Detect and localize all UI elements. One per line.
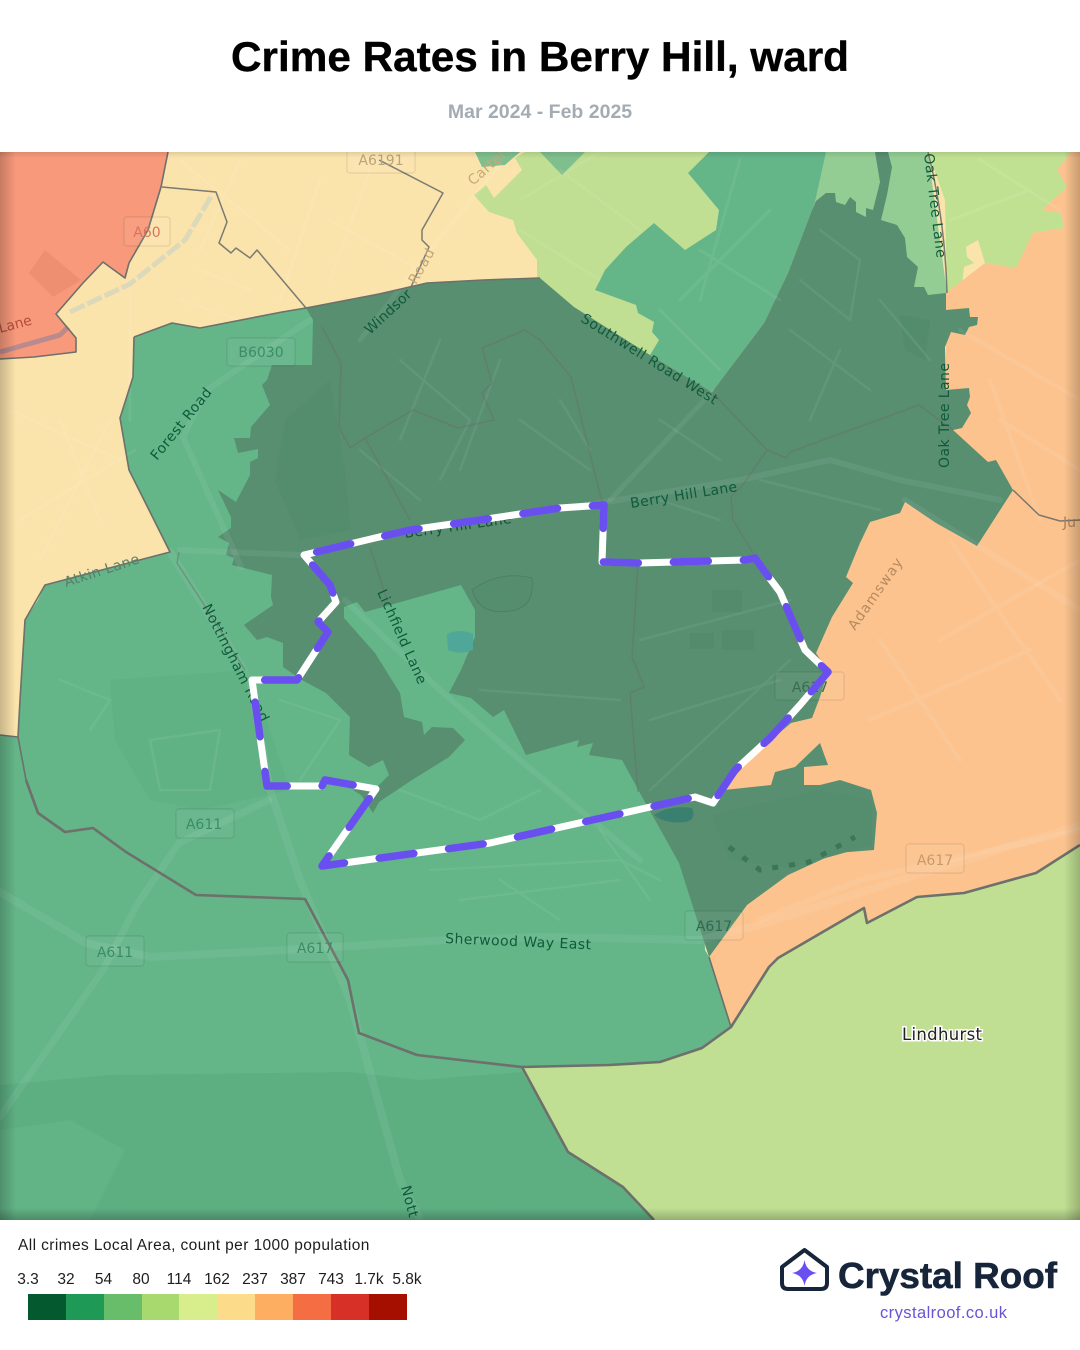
legend tick labels: 3.3 <box>17 1271 39 1288</box>
logo: Crystal Roof <box>780 1248 1058 1322</box>
road shield labels: A6191 <box>358 153 404 169</box>
road shield labels: A611 <box>97 945 133 961</box>
legend tick labels: 80 <box>132 1271 150 1288</box>
road name labels: Road <box>406 246 438 287</box>
road name labels: Adamsway <box>845 555 906 633</box>
road name labels: Southwell Road West <box>578 311 721 408</box>
legend tick labels: 114 <box>167 1271 191 1288</box>
road name labels: Ju <box>1062 515 1076 531</box>
road shield labels: A617 <box>917 853 953 869</box>
road name labels: Forest Road <box>148 385 215 464</box>
road name labels: Nottingham Road <box>198 602 272 725</box>
roads <box>0 152 1080 1220</box>
road name labels: Oak Tree Lane <box>937 363 953 468</box>
title: Crime Rates in Berry Hill, ward <box>231 33 849 80</box>
website url: crystalroof.co.uk <box>880 1304 1008 1322</box>
legend colour scale <box>28 1294 407 1320</box>
road name labels: Berry Hill Lane <box>403 511 513 542</box>
legend tick labels: 1.7k <box>354 1271 384 1288</box>
legend tick labels: 5.8k <box>392 1271 422 1288</box>
area: orange east <box>709 152 1080 1027</box>
subtitle: date range: Mar 2024 - Feb 2025 <box>448 101 632 123</box>
area: mid green west and south <box>0 308 731 1220</box>
area: cream base <box>0 152 1080 1220</box>
area: pale green north <box>812 152 947 310</box>
road shield labels <box>86 148 964 966</box>
road name labels: Nott <box>397 1184 421 1219</box>
icon: house with star <box>782 1250 827 1289</box>
road name labels: Lichfield Lane <box>373 587 429 687</box>
legend tick labels: 387 <box>280 1271 306 1288</box>
place label: Lindhurst: Lindhurst <box>902 1025 983 1044</box>
map: crime rate choropleth <box>0 152 1080 1220</box>
road name labels: Atkin Lane <box>62 551 141 591</box>
road shield labels: A617 <box>297 941 333 957</box>
legend tick labels: 162 <box>204 1271 230 1288</box>
legend tick labels: 743 <box>318 1271 344 1288</box>
interior boundaries <box>162 152 1080 792</box>
map edge vignette <box>0 152 1080 1220</box>
legend tick labels: 237 <box>242 1271 268 1288</box>
legend tick labels: 32 <box>57 1271 75 1288</box>
area: light green north <box>474 152 719 355</box>
road name labels: Berry Hill Lane <box>629 479 738 512</box>
legend title: All crimes Local Area, count per 1000 population <box>18 1237 370 1254</box>
wordmark: Crystal Roof <box>838 1255 1058 1296</box>
road shield labels: B6030 <box>238 345 284 361</box>
road name labels: Windsor <box>362 287 415 338</box>
area: light green south <box>522 845 1080 1220</box>
road name labels: Sherwood Way East <box>445 931 592 953</box>
area: red north-west <box>0 152 168 359</box>
area: light green north-east <box>928 152 1071 312</box>
road shield labels: A60 <box>133 225 161 241</box>
road name labels <box>0 146 1076 1219</box>
water and park features <box>70 195 855 870</box>
legend tick labels <box>17 1271 422 1288</box>
area: small green patches at top edge <box>475 152 585 175</box>
road shield labels: A611 <box>186 817 222 833</box>
outer boundaries <box>0 152 1080 1220</box>
area: mid green north <box>595 152 826 392</box>
legend tick labels: 54 <box>95 1271 112 1288</box>
area: dark green central ward <box>218 152 1013 957</box>
road shield labels: A617 <box>696 919 732 935</box>
ward boundary: Berry Hill <box>252 505 828 866</box>
road shield labels: A617 <box>792 680 828 696</box>
road name labels: Oak Tree Lane <box>920 153 949 259</box>
legend <box>17 1237 422 1320</box>
